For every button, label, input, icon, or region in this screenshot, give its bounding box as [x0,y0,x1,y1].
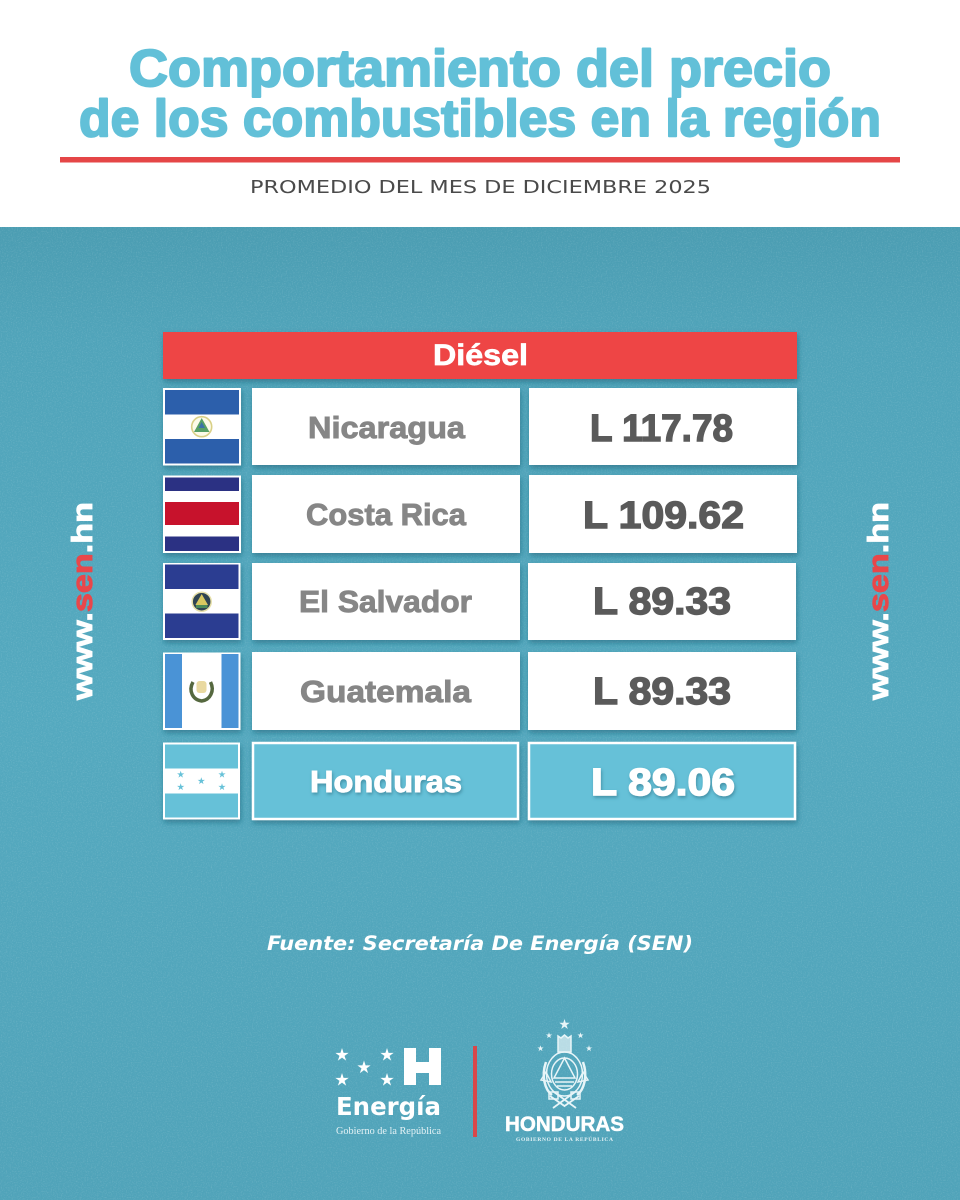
name: Costa Rica [252,475,520,553]
flag: Guatemala [163,652,240,730]
price: Honduras: L 89.06 [591,762,735,804]
row: Nicaragua [163,388,797,466]
title [79,40,881,148]
Honduras tagline: GOBIERNO DE LA REPÚBLICA [516,1135,613,1143]
price: El Salvador: L 89.33 [593,581,731,623]
name: El Salvador [252,563,520,640]
price: Nicaragua: L 117.78 [590,408,733,450]
price: Guatemala [528,652,796,730]
flag: Honduras [164,744,239,818]
name: Honduras: Honduras [310,764,462,799]
price table [163,332,797,819]
name: Costa Rica: Costa Rica [306,497,467,532]
flag: Costa Rica [163,476,241,553]
name: Nicaragua: Nicaragua [308,410,466,445]
logo: Honduras [505,1019,624,1143]
icon: coat of arms [537,1019,592,1108]
table header: Diésel [163,332,797,379]
title: de los combustibles en la región [79,90,881,148]
price: Guatemala: L 89.33 [593,671,731,713]
price: Nicaragua [529,388,797,465]
side url left: www.sen.hn [67,502,99,701]
logo: Energía [335,1048,441,1137]
name: Guatemala: Guatemala [300,674,472,709]
price: Costa Rica: L 109.62 [583,495,744,537]
source note: Fuente: Secretaría De Energía (SEN) [267,932,693,955]
table header: Diésel: Diésel [433,339,528,372]
subtitle: PROMEDIO DEL MES DE DICIEMBRE 2025 [250,178,711,198]
price: Costa Rica [529,475,797,553]
flag: Nicaragua [163,388,241,466]
icon: H mark [404,1048,441,1085]
icon: five stars [335,1048,394,1086]
row: Honduras [164,743,795,819]
logo divider [473,1046,477,1137]
Energía wordmark: Energía [336,1092,441,1121]
name: El Salvador: El Salvador [299,584,472,619]
row: Guatemala [163,652,796,730]
flag: El Salvador [163,563,240,640]
row: El Salvador [163,563,796,640]
row: Costa Rica [163,475,797,553]
name: Nicaragua [252,388,520,465]
HONDURAS wordmark: HONDURAS [505,1113,624,1136]
title: Comportamiento del precio [129,40,831,98]
name: Guatemala [252,652,520,730]
side url right: www.sen.hn [863,502,895,701]
Energía tagline: Gobierno de la República [336,1125,441,1137]
red rule [60,157,900,162]
name: Honduras [253,743,518,819]
price: Honduras [529,743,795,819]
price: El Salvador [528,563,796,640]
header panel [0,0,960,227]
